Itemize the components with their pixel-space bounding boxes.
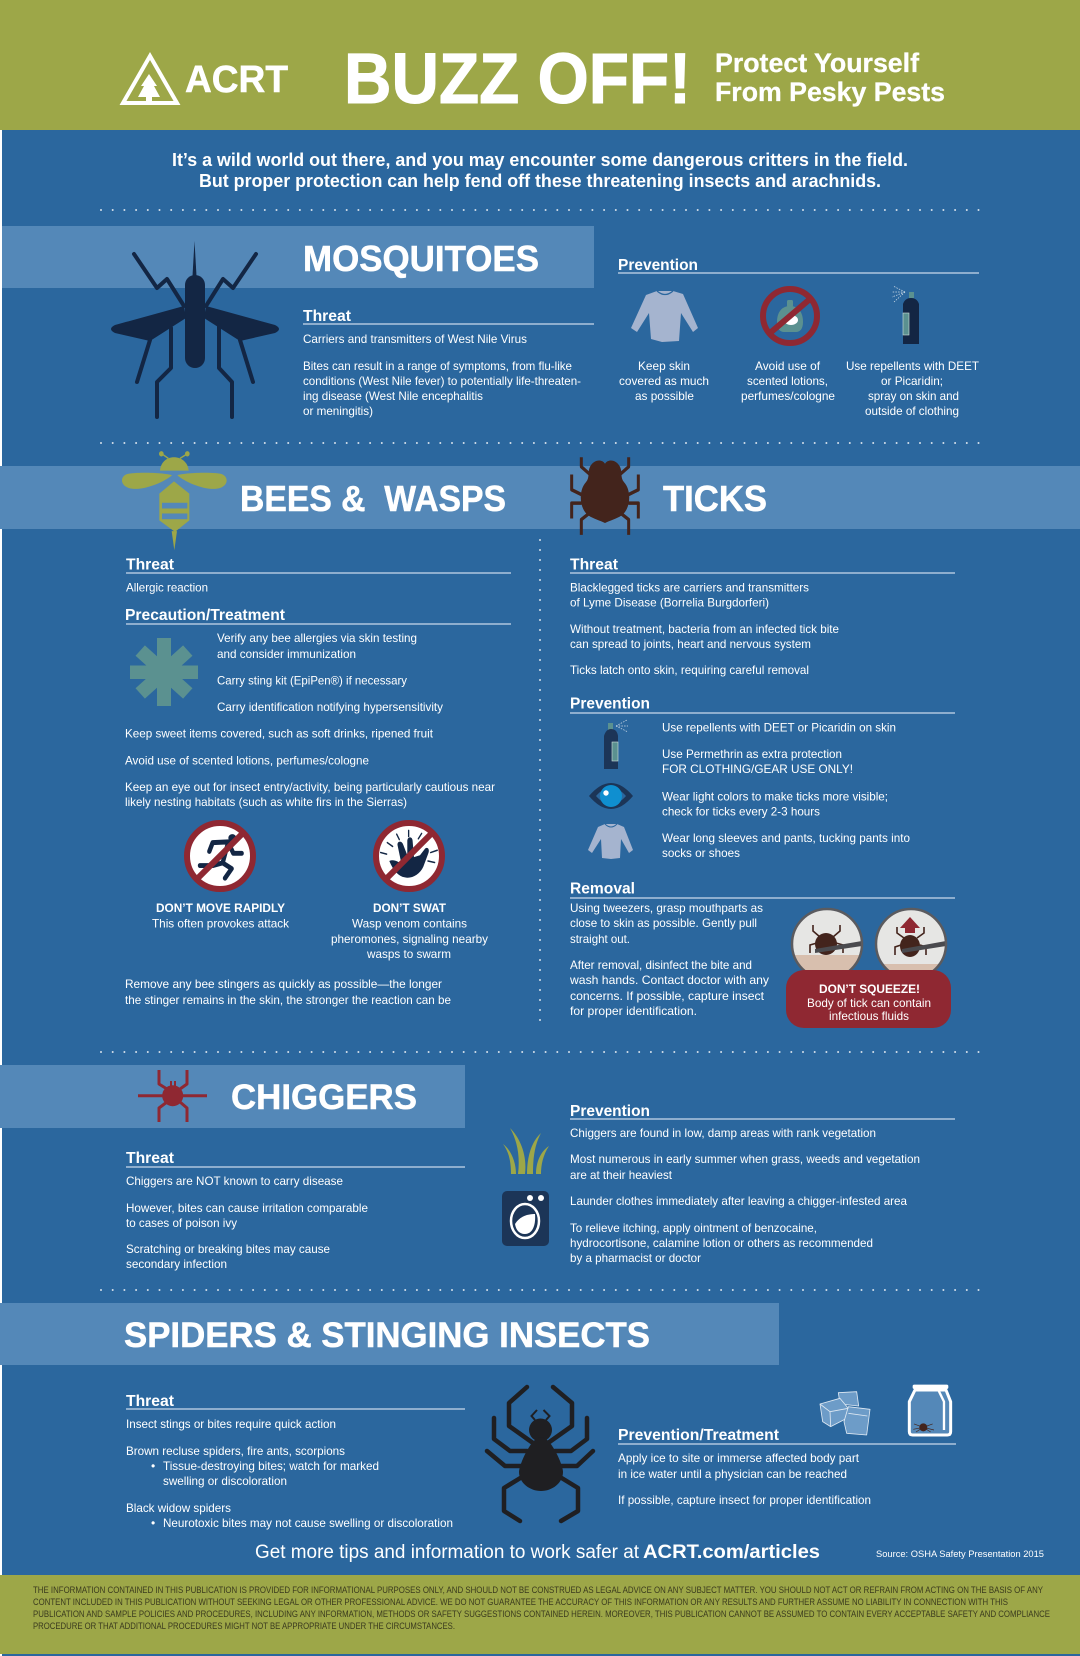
logo: ACRT: ACRT	[185, 59, 288, 101]
threat block: secondary infection	[126, 1257, 227, 1271]
precaution and treatment block: Keep sweet items covered, such as soft drinks, ripened fruit	[125, 726, 434, 740]
icon: medical asterisk	[130, 638, 198, 706]
caption: don't move rapidly	[152, 901, 290, 930]
header banner	[0, 0, 1080, 130]
precaution and treatment block: Avoid use of scented lotions, perfumes/cologne	[125, 754, 369, 768]
removal block: close to skin as possible. Gently pull	[570, 916, 757, 930]
subtitle	[715, 48, 945, 107]
logo: ACRT	[123, 56, 288, 105]
panel: spiders and stinging insects	[0, 1303, 956, 1530]
subtitle: From Pesky Pests	[715, 77, 945, 107]
caption: keep skin covered: Keep skin	[638, 359, 690, 373]
caption: repellents: spray on skin and	[868, 389, 959, 403]
icon: shirt	[631, 291, 698, 342]
caption: don't swat	[331, 901, 488, 961]
precaution and treatment block: and consider immunization	[217, 647, 356, 661]
prevention block: check for ticks every 2-3 hours	[662, 804, 820, 818]
prevention and treatment block: Apply ice to site or immerse affected body part	[618, 1451, 860, 1465]
threat block: Threat	[126, 556, 175, 574]
panel: bees and wasps	[122, 451, 511, 1007]
illustration: tick removal, right circle	[874, 908, 948, 970]
threat block: Insect stings or bites require quick action	[126, 1417, 336, 1431]
caption: avoid scented: Avoid use of	[755, 359, 821, 373]
icon: mosquito	[111, 241, 279, 417]
section band: spiders	[0, 1303, 779, 1365]
icon: don't move rapidly	[187, 823, 253, 889]
removal block: for proper identification.	[570, 1004, 697, 1018]
icon: repellent spray	[892, 286, 919, 344]
caption: avoid scented: perfumes/cologne	[741, 389, 835, 403]
precaution and treatment block: Verify any bee allergies via skin testing	[217, 631, 417, 645]
caption: avoid scented	[741, 359, 835, 403]
caption: repellents: outside of clothing	[865, 404, 959, 418]
icon: eye	[589, 783, 633, 809]
heading: ticks: TICKS	[663, 478, 767, 519]
caption: don't swat: Wasp venom contains	[352, 916, 467, 930]
threat block: Scratching or breaking bites may cause	[126, 1242, 330, 1256]
footer disclaimer: PROCEDURE OR THAT ADDITIONAL PROCEDURES MIGHT NOT BE APPROPRIATE UNDER THE CIRCUMSTANCES.	[33, 1621, 455, 1631]
call to action: Get more tips and information to work safer at	[255, 1542, 640, 1563]
prevention block: Prevention	[570, 1103, 650, 1120]
prevention block: Wear light colors to make ticks more visible;	[662, 790, 888, 804]
caption: avoid scented: scented lotions,	[747, 374, 828, 388]
prevention block: Prevention	[618, 257, 698, 274]
icon: spider	[487, 1387, 593, 1521]
threat block: Chiggers are NOT known to carry disease	[126, 1174, 343, 1188]
prevention and treatment block: in ice water until a physician can be reached	[618, 1467, 847, 1481]
icon: shirt	[588, 824, 633, 859]
prevention block: by a pharmacist or doctor	[570, 1251, 701, 1265]
caption: don't move rapidly: DON’T MOVE RAPIDLY	[156, 901, 285, 915]
prevention block: To relieve itching, apply ointment of benzocaine,	[570, 1221, 817, 1235]
removal block: After removal, disinfect the bite and	[570, 958, 752, 972]
source note: Source: OSHA Safety Presentation 2015	[876, 1549, 1044, 1560]
threat block: can spread to joints, heart and nervous system	[570, 637, 811, 651]
threat block: Allergic reaction	[126, 580, 208, 594]
callout: don't squeeze: infectious fluids	[829, 1009, 909, 1023]
threat block: Threat	[303, 308, 352, 325]
call to action	[255, 1542, 820, 1563]
caption: don't swat: pheromones, signaling nearby	[331, 932, 488, 946]
icon: repellent spray	[604, 720, 628, 769]
prevention block: Wear long sleeves and pants, tucking pants into	[662, 831, 910, 845]
threat block: of Lyme Disease (Borrelia Burgdorferi)	[570, 596, 769, 610]
precaution and treatment block: Carry sting kit (EpiPen®) if necessary	[217, 674, 407, 688]
intro text: It’s a wild world out there, and you may encounter some dangerous critters in the field.	[172, 150, 908, 170]
threat block: Bites can result in a range of symptoms, from flu-like	[303, 359, 572, 373]
intro text	[172, 150, 908, 191]
threat block: Threat	[570, 556, 619, 574]
callout: don't squeeze: Body of tick can contain	[807, 996, 931, 1010]
text: remove stingers: the stinger remains in the skin, the stronger the reaction can be	[125, 993, 451, 1007]
threat block: •	[151, 1459, 155, 1473]
threat block: However, bites can cause irritation comparable	[126, 1201, 368, 1215]
prevention block: Chiggers are found in low, damp areas with rank vegetation	[570, 1126, 876, 1140]
caption: don't move rapidly: This often provokes attack	[152, 916, 290, 930]
icon: grass	[503, 1128, 549, 1174]
prevention block: are at their heaviest	[570, 1168, 673, 1182]
removal block: Using tweezers, grasp mouthparts as	[570, 901, 763, 915]
heading: mosquitoes: MOSQUITOES	[303, 238, 539, 279]
caption: repellents: Use repellents with DEET	[846, 359, 980, 373]
removal block: concerns. If possible, capture insect	[570, 989, 765, 1003]
call to action: ACRT.com/articles	[643, 1542, 820, 1563]
threat block: Carriers and transmitters of West Nile Virus	[303, 332, 527, 346]
threat block	[303, 308, 594, 418]
icon: tick	[572, 457, 638, 535]
icon: don't swat	[376, 823, 442, 889]
intro text: But proper protection can help fend off these threatening insects and arachnids.	[199, 171, 881, 191]
removal block: wash hands. Contact doctor with any	[569, 973, 769, 987]
section band: bees and ticks	[0, 466, 1080, 529]
heading: spiders and stinging insects: SPIDERS & STINGING INSECTS	[124, 1316, 650, 1355]
icon: ice cubes	[820, 1392, 870, 1435]
caption: repellents	[846, 359, 980, 418]
threat block: swelling or discoloration	[163, 1474, 287, 1488]
prevention block: FOR CLOTHING/GEAR USE ONLY!	[662, 762, 853, 776]
title: BUZZ OFF!	[344, 40, 691, 119]
precaution and treatment block: Precaution/Treatment	[125, 607, 286, 624]
icon: insect jar	[909, 1385, 951, 1435]
threat block: •	[151, 1516, 155, 1530]
subtitle: Protect Yourself	[715, 48, 920, 78]
caption: keep skin covered: as possible	[635, 389, 694, 403]
threat block: Without treatment, bacteria from an infected tick bite	[570, 622, 839, 636]
precaution and treatment block	[125, 607, 511, 809]
removal block: Removal	[570, 880, 635, 898]
precaution and treatment block: likely nesting habitats (such as white firs in the Sierras)	[125, 795, 407, 809]
prevention and treatment block: If possible, capture insect for proper identification	[618, 1493, 871, 1507]
prevention block	[570, 1103, 955, 1265]
callout: don't squeeze: DON’T SQUEEZE!	[819, 982, 920, 996]
caption: don't swat: DON’T SWAT	[373, 901, 447, 915]
prevention block	[618, 257, 980, 418]
icon: chigger	[138, 1070, 207, 1122]
precaution and treatment block: Carry identification notifying hypersensitivity	[217, 700, 443, 714]
heading: chiggers: CHIGGERS	[231, 1078, 417, 1117]
caption: don't swat: wasps to swarm	[366, 947, 451, 961]
prevention block: hydrocortisone, calamine lotion or others as recommended	[570, 1236, 873, 1250]
threat block: Brown recluse spiders, fire ants, scorpions	[126, 1444, 345, 1458]
prevention and treatment block	[618, 1427, 956, 1507]
prevention block: Use Permethrin as extra protection	[662, 747, 842, 761]
text: remove stingers	[125, 977, 451, 1007]
threat block: ing disease (West Nile encephalitis	[303, 389, 483, 403]
threat block: conditions (West Nile fever) to potentially life-threaten-	[303, 374, 581, 388]
threat block	[126, 1150, 465, 1271]
text: remove stingers: Remove any bee stingers as quickly as possible—the longer	[125, 977, 442, 991]
prevention block	[570, 696, 955, 860]
prevention and treatment block: Prevention/Treatment	[618, 1427, 780, 1444]
heading: bees and wasps: BEES & WASPS	[240, 478, 506, 519]
prevention block: Prevention	[570, 696, 650, 712]
prevention block: Launder clothes immediately after leaving a chigger-infested area	[570, 1194, 907, 1208]
removal block: straight out.	[570, 932, 630, 946]
threat block: Ticks latch onto skin, requiring careful removal	[570, 663, 809, 677]
prevention block: Use repellents with DEET or Picaridin on skin	[662, 720, 896, 734]
removal block	[569, 880, 955, 1018]
section band: mosquitoes	[2, 226, 594, 288]
caption: repellents: or Picaridin;	[881, 374, 943, 388]
caption: keep skin covered	[619, 359, 709, 403]
icon: bee	[122, 451, 227, 550]
panel: chiggers	[0, 1065, 955, 1271]
prevention block: socks or shoes	[662, 846, 740, 860]
threat block: Black widow spiders	[126, 1501, 231, 1515]
section band: chiggers	[0, 1065, 465, 1128]
callout: don't squeeze	[786, 970, 951, 1028]
illustration: tick removal, left circle	[790, 908, 864, 970]
threat block: Threat	[126, 1393, 175, 1410]
threat block: Tissue-destroying bites; watch for marked	[163, 1459, 379, 1473]
threat block	[570, 556, 955, 677]
prevention block: Most numerous in early summer when grass, weeds and vegetation	[570, 1152, 920, 1166]
caption: keep skin covered: covered as much	[619, 374, 709, 388]
threat block: to cases of poison ivy	[126, 1216, 237, 1230]
threat block	[126, 1393, 465, 1530]
panel: mosquitoes	[2, 226, 980, 418]
threat block: Threat	[126, 1150, 175, 1167]
precaution and treatment block: Keep an eye out for insect entry/activity, being particularly cautious near	[125, 780, 495, 794]
icon: no scented lotions	[763, 289, 817, 343]
threat block: or meningitis)	[303, 404, 373, 418]
threat block: Blacklegged ticks are carriers and transmitters	[570, 580, 809, 594]
icon: washing machine	[502, 1191, 549, 1246]
panel: ticks	[569, 457, 955, 1028]
threat block	[126, 556, 511, 594]
footer disclaimer	[0, 1575, 1080, 1654]
threat block: Neurotoxic bites may not cause swelling or discoloration	[163, 1516, 453, 1530]
